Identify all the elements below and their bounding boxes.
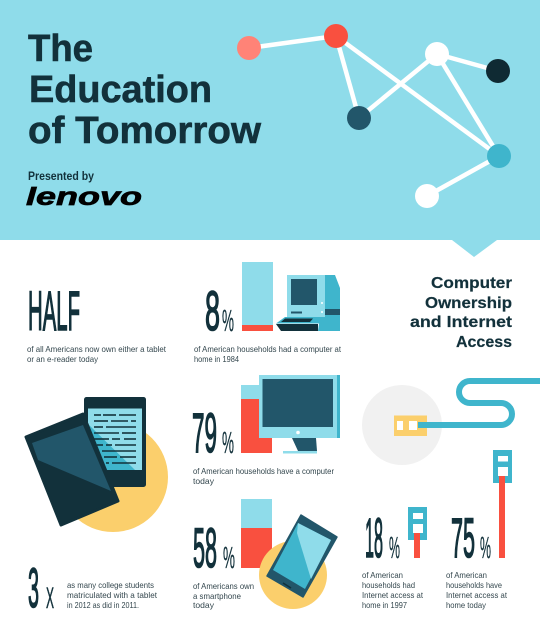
section heading: [410, 275, 512, 351]
icon: 1984 computer: [276, 275, 340, 331]
icon: ethernet plug 75 percent: [493, 450, 512, 558]
stat: 79 percent: today: [193, 476, 215, 486]
stat: 18 percent: %: [389, 530, 400, 565]
stat: 3x: as many college students: [67, 580, 154, 590]
stat: 58 percent: a smartphone: [193, 591, 241, 601]
stat: 75 percent: home today: [446, 600, 487, 610]
stat: half: HALF: [28, 279, 80, 342]
stat: 58 percent: of Americans own: [193, 581, 254, 591]
lenovo logo: lenovo: [26, 183, 142, 211]
stat: 75 percent: [446, 506, 508, 610]
stat: 79 percent: 79: [192, 401, 217, 464]
stat: 75 percent: Internet access at: [446, 590, 508, 600]
title: of Tomorrow: [28, 110, 261, 152]
section heading: Computer: [431, 275, 512, 292]
title: Education: [29, 69, 212, 111]
presented by: Presented by: [28, 171, 95, 183]
stat: 75 percent: of American: [446, 570, 487, 580]
panel: header: [0, 0, 540, 257]
stat: 18 percent: home in 1997: [362, 600, 407, 610]
stat: 18 percent: of American: [362, 570, 403, 580]
stat: 79 percent: [192, 385, 334, 486]
stat: 79 percent: of American households have a computer: [193, 466, 334, 476]
icon: ethernet plug 18 percent: [408, 507, 427, 558]
icon: smartphone: [259, 515, 337, 609]
stat: 58 percent: [193, 499, 272, 610]
stat: 3x: X: [46, 582, 54, 615]
stat: 58 percent: today: [193, 600, 215, 610]
stat: 18 percent: Internet access at: [362, 590, 424, 600]
stat: 3x: matriculated with a tablet: [67, 590, 158, 600]
section heading: and Internet: [410, 314, 512, 331]
icon: tablet and e-reader: [26, 397, 168, 532]
stat: 18 percent: 18: [365, 506, 383, 569]
stat: 75 percent: %: [480, 530, 491, 565]
icon: desktop monitor: [259, 375, 340, 454]
section heading: Ownership: [425, 295, 512, 312]
stat: 8 percent: [194, 262, 342, 364]
stat: half: or an e-reader today: [27, 354, 99, 364]
stat: 3x: [28, 556, 158, 619]
stat: 3x: 3: [28, 556, 39, 619]
title: The: [28, 28, 93, 70]
stat: 3x: in 2012 as did in 2011.: [67, 600, 139, 610]
icon: internet cable: [362, 381, 540, 465]
stat: 8 percent: home in 1984: [194, 354, 239, 364]
stat: 8 percent: 8: [205, 279, 220, 342]
title: [28, 28, 261, 152]
stat: 8 percent: %: [222, 303, 234, 338]
stat: 18 percent: [362, 506, 424, 610]
stat: half: of all Americans now own either a tablet: [27, 344, 167, 354]
network diagram: [237, 24, 511, 208]
stat: 58 percent: 58: [193, 516, 217, 579]
stat: 18 percent: households had: [362, 580, 415, 590]
stat: 75 percent: 75: [451, 506, 475, 569]
stat: 58 percent: %: [223, 540, 235, 575]
stat: 79 percent: %: [222, 425, 234, 460]
stat: 75 percent: households have: [446, 580, 502, 590]
stat: 8 percent: of American households had a computer at: [194, 344, 342, 354]
section heading: Access: [456, 334, 512, 351]
